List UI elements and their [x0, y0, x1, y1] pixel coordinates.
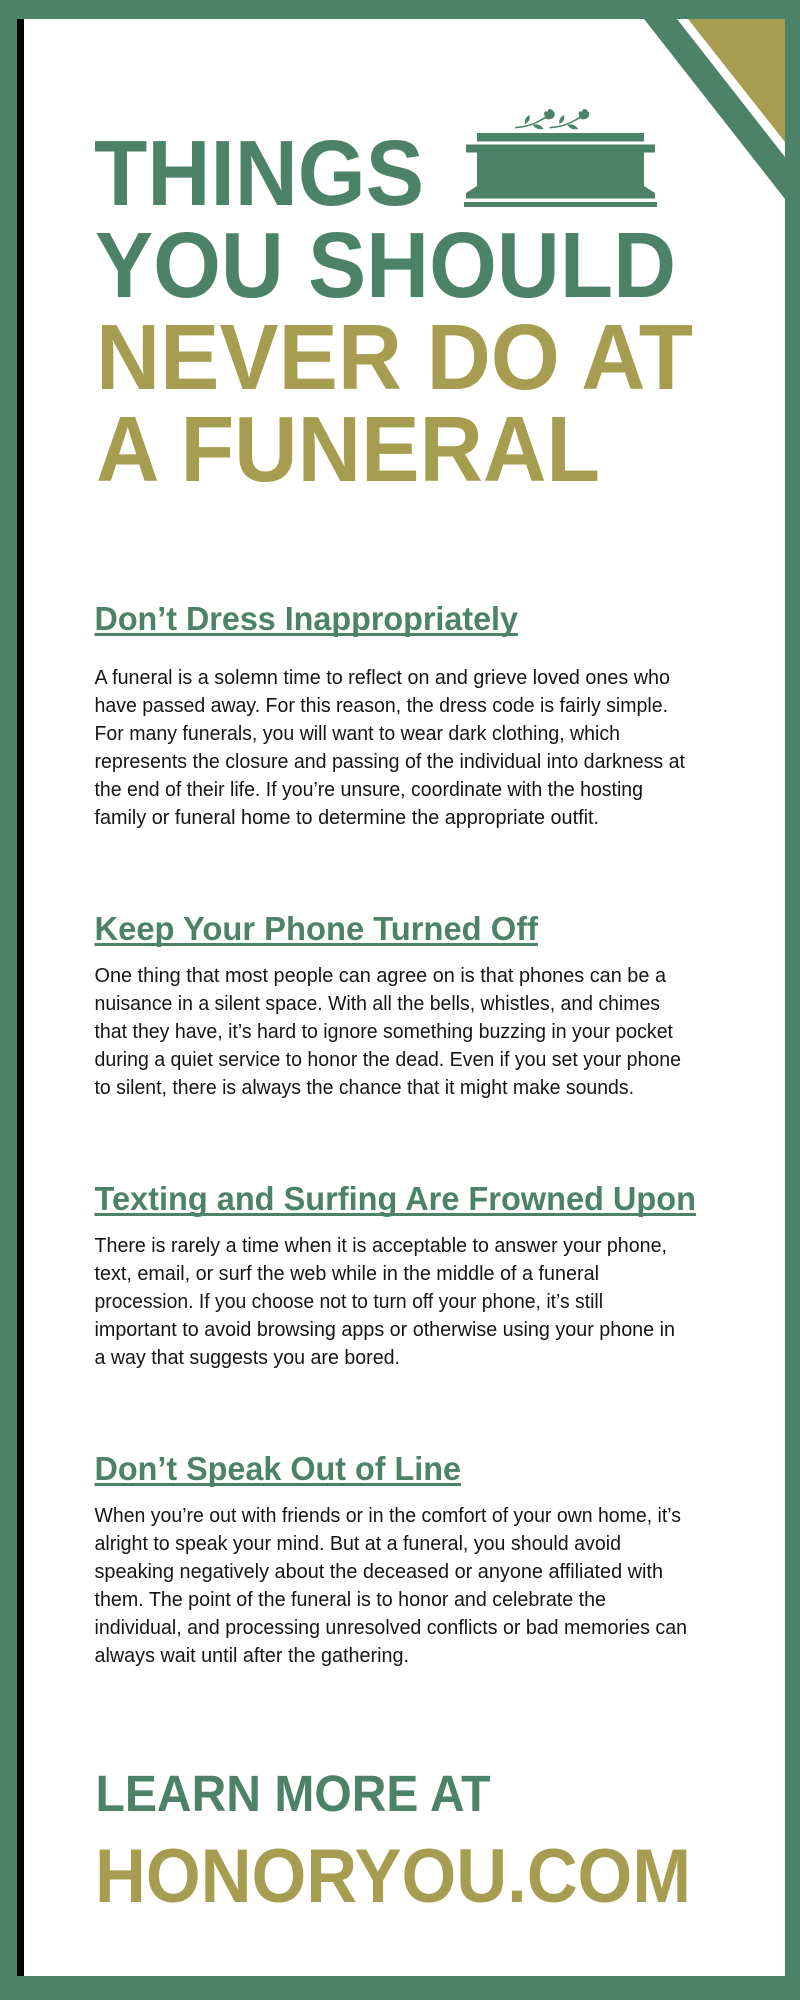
heading: Don’t Speak Out of Line	[94, 1450, 461, 1487]
body text: the end of their life. If you’re unsure, coordinate with the hosting	[94, 779, 643, 801]
body text: speaking negatively about the deceased or anyone affiliated with	[94, 1561, 663, 1583]
section: don't dress inappropriately	[94, 600, 685, 829]
title: YOU SHOULD	[95, 213, 676, 317]
section: texting and surfing	[94, 1180, 696, 1369]
body text: For many funerals, you will want to wear dark clothing, which	[94, 723, 620, 745]
body text: When you’re out with friends or in the comfort of your own home, it’s	[94, 1505, 681, 1527]
body text	[94, 1235, 675, 1369]
black left edge stripe	[17, 19, 24, 1976]
section: don't speak out of line	[94, 1450, 687, 1667]
body text: to silent, there is always the chance that it might make sounds.	[94, 1077, 634, 1099]
body text: represents the closure and passing of the individual into darkness at	[94, 751, 685, 773]
body text: individual, and processing unresolved conflicts or bad memories can	[94, 1617, 687, 1639]
body text: that they have, it’s hard to ignore something buzzing in your pocket	[94, 1021, 673, 1043]
body text: them. The point of the funeral is to honor and celebrate the	[94, 1589, 606, 1611]
body text	[94, 1505, 687, 1667]
heading: Texting and Surfing Are Frowned Upon	[94, 1180, 696, 1217]
body text: alright to speak your mind. But at a funeral, you should avoid	[94, 1533, 621, 1555]
footer: learn more at: LEARN MORE AT	[96, 1765, 490, 1822]
corner ribbon: green diagonal band	[644, 19, 785, 199]
heading: Don’t Dress Inappropriately	[94, 600, 519, 637]
title: THINGS	[94, 121, 424, 225]
body text: nuisance in a silent space. With all the bells, whistles, and chimes	[94, 993, 660, 1015]
body text: procession. If you choose not to turn off your phone, it’s still	[94, 1291, 603, 1313]
title: NEVER DO AT	[96, 305, 693, 409]
body text: A funeral is a solemn time to reflect on and grieve loved ones who	[94, 667, 670, 689]
body text: One thing that most people can agree on is that phones can be a	[94, 965, 667, 987]
body text: text, email, or surf the web while in the middle of a funeral	[94, 1263, 599, 1285]
section: keep your phone turned off	[94, 910, 681, 1099]
title	[94, 121, 693, 501]
body text: There is rarely a time when it is acceptable to answer your phone,	[94, 1235, 667, 1257]
body text: family or funeral home to determine the appropriate outfit.	[94, 807, 599, 829]
footer: website url: HONORYOU.COM	[95, 1834, 691, 1919]
body text	[94, 965, 681, 1099]
body text: a way that suggests you are bored.	[94, 1347, 400, 1369]
body text: during a quiet service to honor the dead. Even if you set your phone	[94, 1049, 681, 1071]
icon: casket with flowers	[464, 109, 657, 207]
heading: Keep Your Phone Turned Off	[94, 910, 539, 947]
body text: important to avoid browsing apps or otherwise using your phone in	[94, 1319, 675, 1341]
title: A FUNERAL	[96, 397, 600, 501]
body text: always wait until after the gathering.	[94, 1645, 409, 1667]
icon: flower sprigs	[515, 109, 589, 129]
body text: have passed away. For this reason, the dress code is fairly simple.	[94, 695, 668, 717]
body text	[94, 667, 685, 829]
corner ribbon: gold triangle	[688, 19, 785, 142]
